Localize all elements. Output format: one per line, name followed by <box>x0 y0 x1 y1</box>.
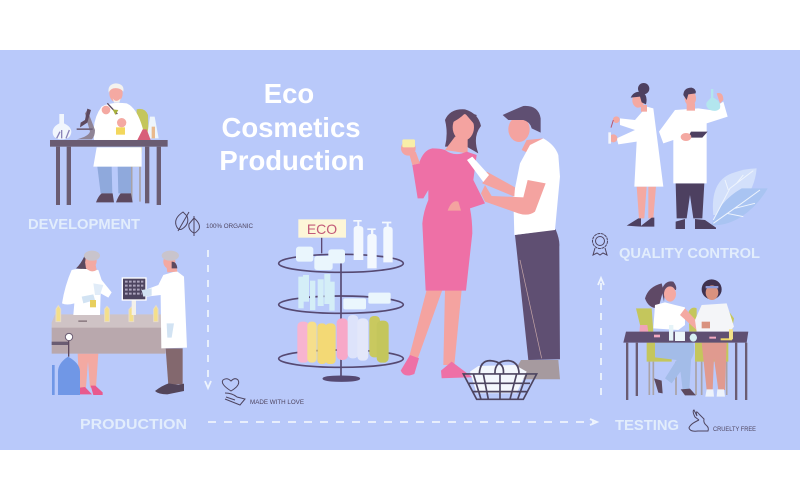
panel: couple <box>401 106 560 399</box>
worker man <box>142 251 187 394</box>
bottles <box>56 306 158 322</box>
panel: quality control <box>608 83 768 229</box>
leaves <box>712 168 768 225</box>
panel: shelf with products <box>279 219 403 381</box>
scientist <box>93 83 144 202</box>
beakers <box>137 117 159 140</box>
screen <box>122 277 147 315</box>
desk <box>50 140 168 205</box>
title: Eco <box>264 78 314 109</box>
sign: ECO <box>307 221 337 237</box>
gas tank and gauge <box>52 333 80 395</box>
rack <box>279 254 403 381</box>
title: Production <box>219 145 365 176</box>
woman in lab coat <box>608 83 663 227</box>
woman legs <box>78 354 103 395</box>
tubes <box>298 274 335 311</box>
arrow: production to testing <box>208 419 597 425</box>
label: quality control: QUALITY CONTROL <box>619 246 760 262</box>
arrow: testing to quality control <box>598 278 604 395</box>
woman <box>401 109 485 378</box>
sign <box>298 219 346 253</box>
title: Cosmetics <box>221 112 361 143</box>
icon: heart in hand <box>222 379 245 405</box>
chairs <box>636 308 734 395</box>
label: production: PRODUCTION <box>80 417 187 433</box>
seated woman left <box>632 281 702 395</box>
panel: background <box>0 50 800 450</box>
icon: quality ribbon <box>592 234 608 255</box>
text: cruelty free: CRUELTY FREE <box>713 426 757 433</box>
text: made with love: MADE WITH LOVE <box>250 399 305 406</box>
man in lab coat <box>659 88 728 229</box>
worker woman <box>62 251 112 315</box>
basket <box>463 361 537 399</box>
microscope <box>77 109 95 139</box>
testing table <box>623 325 748 400</box>
large bottles <box>297 315 389 364</box>
panel: testing <box>623 279 748 400</box>
icon: rabbit <box>689 410 708 431</box>
label: testing: TESTING <box>615 418 679 434</box>
man <box>467 106 560 379</box>
panel: production <box>52 251 187 395</box>
arrow: development to production <box>205 250 211 388</box>
chair <box>130 109 149 202</box>
pump bottles <box>353 220 393 268</box>
conveyor table <box>52 314 166 354</box>
label: development: DEVELOPMENT <box>28 217 140 233</box>
title <box>219 78 365 176</box>
flask with lavender <box>53 114 71 139</box>
icon: leaves <box>176 212 199 236</box>
jars <box>296 247 391 309</box>
text: organic: 100% ORGANIC <box>206 223 253 230</box>
panel: development <box>50 83 168 205</box>
seated woman right <box>695 279 734 397</box>
